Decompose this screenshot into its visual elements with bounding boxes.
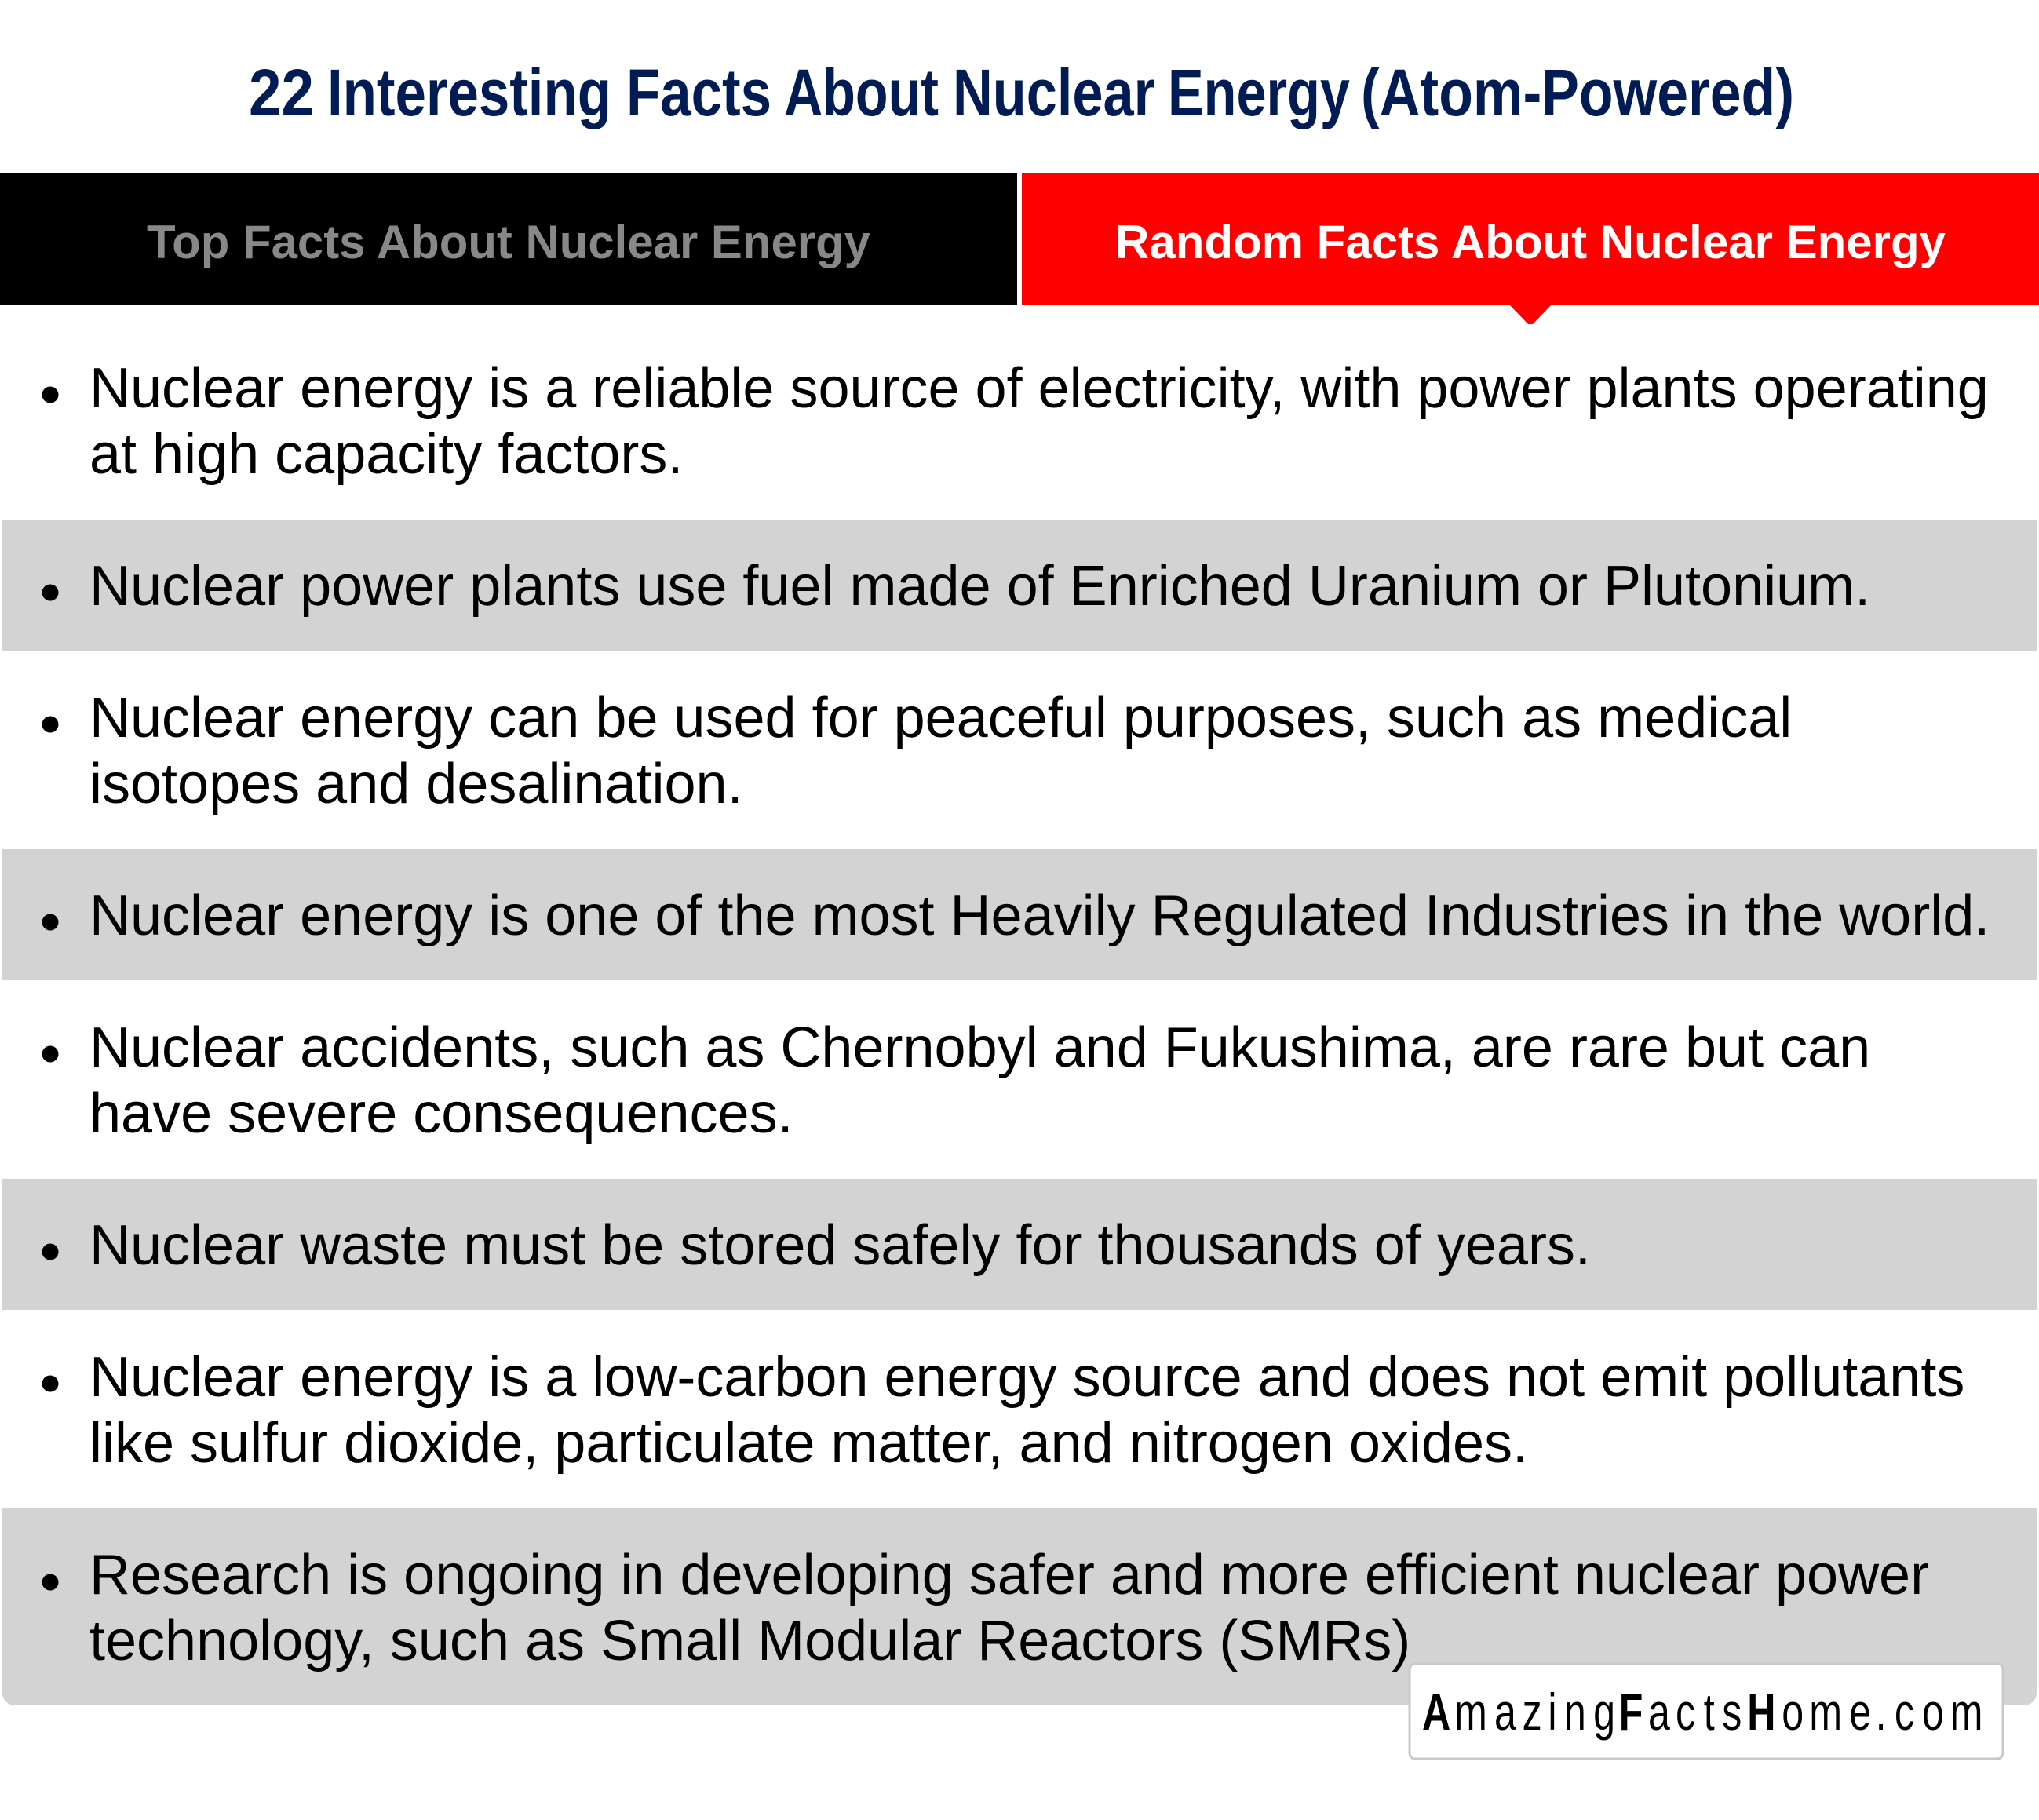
fact 1: at high capacity factors. (89, 423, 683, 486)
watermark: AmazingFactsHome.com: mazing (1454, 1683, 1615, 1742)
title: 22 (249, 56, 314, 129)
fact 5: have severe consequences. (89, 1082, 793, 1145)
fact 3: isotopes and desalination. (89, 753, 743, 815)
fact 1: Nuclear energy is a reliable source of electricity, with power plants operating (89, 357, 1989, 420)
fact 7: like sulfur dioxide, particulate matter, and nitrogen oxides. (89, 1412, 1528, 1475)
fact 1 (42, 357, 1989, 486)
title: About (784, 56, 939, 129)
watermark: AmazingFactsHome.com: H (1747, 1683, 1775, 1742)
fact 6: Nuclear waste must be stored safely for thousands of years. (89, 1214, 1591, 1277)
watermark: AmazingFactsHome.com: F (1619, 1683, 1643, 1742)
fact 3: Nuclear energy can be used for peaceful purposes, such as medical (89, 687, 1792, 750)
tab: top facts (inactive): Top Facts About Nuclear Energy (147, 216, 871, 268)
fact 5: Nuclear accidents, such as Chernobyl and Fukushima, are rare but can (89, 1016, 1870, 1079)
tab: random facts (active): Random Facts About Nuclear Energy (1115, 216, 1946, 268)
tab: top facts (inactive) (0, 173, 1017, 305)
tab: random facts (active) (1022, 173, 2039, 324)
fact 8: technology, such as Small Modular Reactors (SMRs) (89, 1610, 1410, 1672)
fact 6 (2, 1179, 2037, 1310)
title: Nuclear (953, 56, 1155, 129)
fact 4: Nuclear energy is one of the most Heavily Regulated Industries in the world. (89, 884, 1990, 947)
watermark: AmazingFactsHome.com (1410, 1664, 2003, 1759)
watermark: AmazingFactsHome.com: ome.com (1782, 1683, 1982, 1742)
fact 2 (2, 520, 2037, 651)
watermark: AmazingFactsHome.com: A (1422, 1683, 1450, 1742)
title: Facts (626, 56, 771, 129)
fact 8 (2, 1508, 2037, 1705)
title: (Atom-Powered) (1361, 56, 1794, 129)
fact 2: Nuclear power plants use fuel made of Enriched Uranium or Plutonium. (89, 555, 1870, 618)
title: Interesting (327, 56, 611, 129)
fact 3 (42, 687, 1792, 815)
watermark: AmazingFactsHome.com: acts (1648, 1683, 1742, 1742)
title (249, 56, 1794, 129)
fact 7 (42, 1346, 1964, 1475)
fact 8: Research is ongoing in developing safer and more efficient nuclear power (89, 1544, 1929, 1607)
fact 4 (2, 849, 2037, 980)
fact 5 (42, 1016, 1870, 1145)
title: Energy (1168, 56, 1350, 129)
fact 7: Nuclear energy is a low-carbon energy source and does not emit pollutants (89, 1346, 1964, 1409)
